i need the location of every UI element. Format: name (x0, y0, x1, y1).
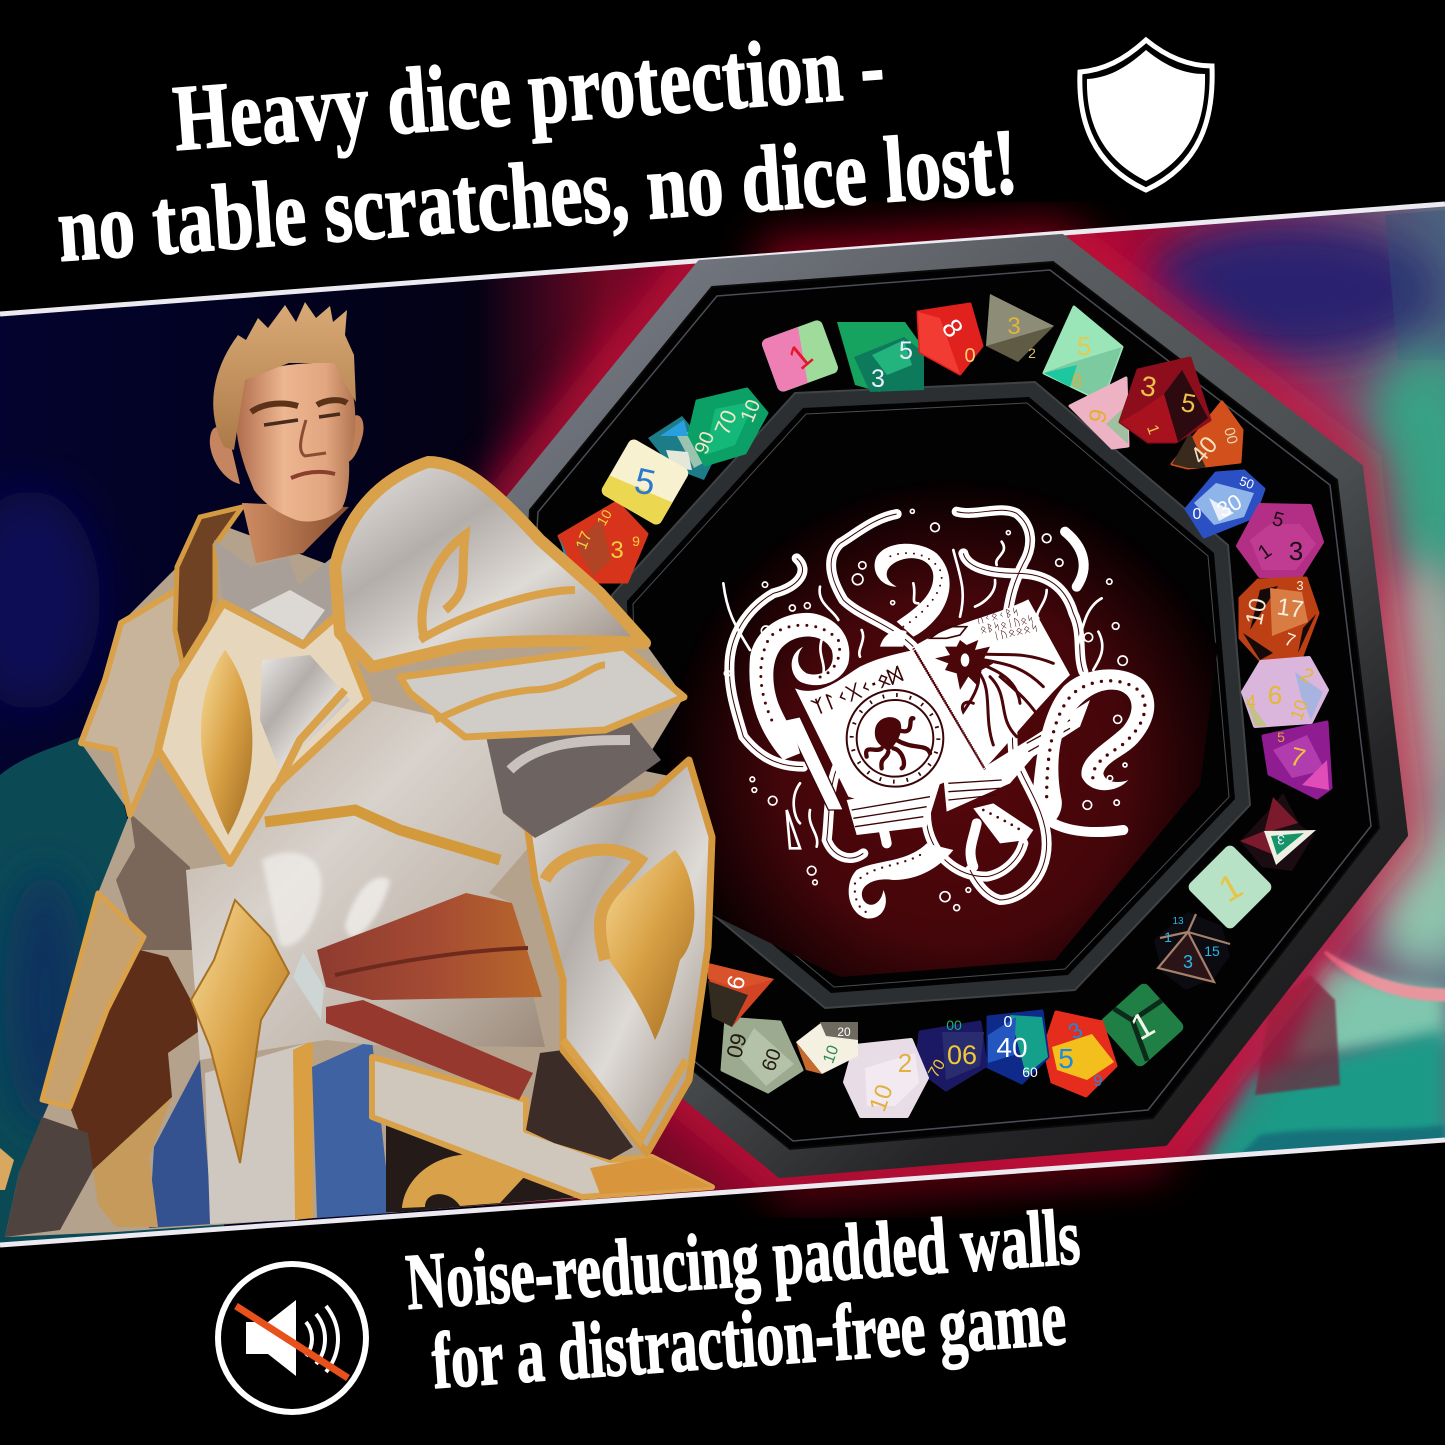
chest gold flame (201, 650, 252, 835)
right page script line 2: ᛟᛒᛋᛟᛁᚢᛟᛋ (979, 613, 1035, 636)
collar highlight (250, 590, 325, 640)
die 14 (1240, 793, 1316, 871)
waist gold band (265, 810, 500, 860)
inner octagon wall (612, 382, 1250, 1008)
die 28 (689, 389, 767, 465)
die 11: 17 (1275, 593, 1305, 624)
dark waist armor (116, 813, 192, 950)
die 8: 00 (1220, 426, 1241, 446)
seal creature tentacles (866, 718, 930, 768)
red glow behind tray (487, 237, 1405, 1175)
left blue tabard (149, 1060, 212, 1228)
white center strip (205, 1043, 307, 1224)
right ear (347, 415, 364, 462)
die 18: 5 (1058, 1043, 1074, 1074)
chest gold edge (275, 690, 345, 790)
die 16: 1 (1164, 929, 1172, 945)
leather arm interior (70, 950, 205, 1170)
lower pauldron plate (400, 647, 684, 737)
right teal mist (1365, 350, 1445, 590)
top tentacle (875, 544, 950, 637)
tray rolling channel (512, 262, 1379, 1149)
die 12: 4 (1246, 692, 1256, 712)
left arm gold strip (42, 893, 144, 1107)
seal rune marks (852, 695, 938, 782)
left sky glow (0, 490, 100, 710)
die 19: 60 (1022, 1064, 1038, 1080)
seal rings (847, 690, 943, 787)
die 26 (600, 437, 690, 527)
mouth (291, 472, 335, 478)
die 18: 3 (1064, 1017, 1087, 1045)
sword stub (0, 1148, 14, 1190)
left teal hills (0, 725, 230, 1250)
die 4: 3 (1007, 313, 1021, 340)
die 16 (1154, 912, 1230, 990)
neck (242, 503, 349, 563)
skirt orange corner (590, 1157, 712, 1194)
die 23: 09 (721, 1031, 752, 1061)
bubbles (724, 509, 1127, 911)
distant ship (1255, 975, 1340, 1095)
die 3: 8 (936, 314, 969, 343)
right page creature tentacles (962, 653, 1053, 745)
die 13 (1263, 722, 1331, 798)
die 13: 7 (1287, 741, 1309, 773)
right purple sky (1140, 220, 1440, 360)
die 12 (1243, 658, 1327, 726)
die 19 (988, 1011, 1048, 1083)
die 2 front (854, 337, 924, 393)
dice tray (487, 237, 1405, 1175)
red glow above band (732, 202, 1117, 256)
die 15 (1186, 843, 1274, 931)
die 11: 7 (1282, 629, 1298, 651)
die 24 (708, 963, 774, 1027)
torso highlight 2 (345, 877, 390, 937)
forearm gold flame (600, 850, 694, 1040)
dice ring (559, 294, 1331, 1116)
chest silver inset (260, 655, 350, 770)
die 9: 30 (1212, 489, 1246, 523)
right pauldron (335, 462, 645, 667)
upper arm dark (484, 713, 661, 838)
die 20: 06 (947, 1040, 977, 1070)
nose (301, 420, 326, 456)
tentacle suckers (761, 553, 1145, 913)
die 17: 1 (1123, 1003, 1161, 1048)
die 11 (1240, 578, 1318, 660)
die 2 front: 5 (899, 337, 913, 365)
body silhouette (5, 462, 712, 1237)
die 11: 3 (1296, 578, 1304, 593)
right pale mist (1377, 538, 1445, 810)
die 2 front: 3 (871, 365, 885, 393)
die 24: 6 (722, 973, 751, 993)
die 25: 10 (593, 507, 615, 528)
knight figure (0, 302, 712, 1237)
lower tentacle (849, 843, 953, 918)
die 16: 3 (1183, 952, 1193, 972)
right page script line 3: ᛁᚢᛟᛟᛟᛋ (991, 621, 1040, 643)
die 4: 2 (1028, 345, 1036, 361)
tray outer wall (487, 237, 1405, 1175)
die 22: 20 (837, 1025, 851, 1039)
die 7: 5 (1179, 387, 1198, 419)
red glow below band (760, 1140, 1170, 1200)
chest plate (158, 603, 368, 863)
die 20: 70 (925, 1057, 949, 1081)
die 26: 5 (631, 459, 659, 504)
eyes (264, 414, 340, 425)
die 28: 90 (691, 429, 719, 457)
pauldron plate line (420, 590, 575, 640)
die 5: 5 (1077, 331, 1091, 361)
die 22 (796, 1022, 858, 1074)
die 16: 15 (1204, 943, 1220, 959)
ribbon hatch lines (729, 510, 1083, 900)
eyebrows (251, 400, 347, 412)
book page block left (847, 783, 940, 835)
die 8 (1172, 402, 1242, 469)
die 5 (1044, 307, 1122, 401)
right page (913, 599, 1070, 768)
die 1 (760, 319, 840, 393)
die 9 (1186, 471, 1264, 537)
lower plate filigree (435, 665, 605, 720)
cape collar (175, 507, 242, 700)
die 28: 70 (709, 406, 742, 438)
background scene band (0, 200, 1445, 1250)
forearm gold band (545, 850, 640, 960)
die 3: 0 (964, 345, 976, 367)
die 1: 1 (781, 336, 820, 377)
left tentacle (749, 613, 849, 760)
blue tabard centre (312, 1040, 391, 1218)
hair (213, 302, 356, 450)
belt silver clasp (293, 952, 324, 1020)
book cover left (785, 717, 843, 810)
die 6: 9 (1084, 406, 1113, 426)
left ear (210, 427, 240, 484)
upper arm highlight (510, 740, 630, 770)
gauntlet right (526, 1050, 633, 1160)
gold center strip (293, 1040, 313, 1220)
die 16: 13 (1172, 916, 1184, 927)
right pale sky (1290, 960, 1445, 1060)
page block hatch left (852, 797, 930, 827)
die 9: 0 (1193, 506, 1202, 523)
left blue hill shade (5, 870, 85, 1130)
open book (785, 599, 1090, 835)
die 25: 9 (632, 533, 640, 549)
die 19: 0 (1004, 1014, 1013, 1031)
die 25: 17 (573, 529, 596, 552)
page corner sigil (930, 627, 967, 638)
knee gold (402, 1154, 526, 1208)
die 28: 10 (737, 397, 765, 425)
die 10: 3 (1289, 536, 1303, 566)
book page block right (943, 700, 1090, 812)
white band edge top (0, 204, 1445, 314)
die 23: 60 (758, 1046, 786, 1074)
right teal panel (1385, 210, 1445, 360)
belt strap (326, 1000, 533, 1100)
pink arc (1325, 952, 1445, 1000)
die 27 (648, 416, 716, 480)
top tentacle stub (880, 630, 907, 647)
sea dark wave (1241, 1123, 1445, 1152)
die 18 (1044, 1012, 1116, 1096)
die 4 (986, 294, 1054, 362)
heading top (54, 14, 1021, 282)
die 15: 1 (1211, 865, 1249, 910)
creature eye (961, 653, 969, 667)
die 25 (559, 502, 647, 582)
die 7: 3 (1138, 370, 1159, 403)
face (236, 363, 355, 522)
neck collar (214, 540, 340, 645)
die 11: 10 (1241, 596, 1273, 628)
die 17 (1098, 981, 1186, 1069)
heading line 1: Heavy dice protection - (170, 14, 888, 171)
die 13: 5 (1277, 729, 1285, 745)
left page script: ᛉᛚᚲᚷᚲ·ᛟᛞ (809, 663, 905, 718)
book spine line (913, 648, 985, 769)
icon: shield (1080, 40, 1212, 190)
right lower pale green (1365, 790, 1445, 970)
inner thin line (633, 403, 1229, 987)
heading line 2: no table scratches, no dice lost! (54, 109, 1021, 282)
die 21: 2 (898, 1048, 912, 1078)
die 21 (845, 1040, 927, 1116)
seal creature head (875, 717, 901, 752)
lower right tentacle (973, 803, 1033, 843)
die 5: 8 (1072, 371, 1082, 391)
forearm lower gold edge (563, 1040, 686, 1140)
die 10 (1238, 505, 1322, 577)
caption line 1: Noise-reducing padded walls (403, 1193, 1083, 1327)
dark under skirt (386, 1123, 582, 1212)
die 9: 50 (1237, 473, 1256, 492)
die 3 (918, 304, 982, 374)
belt fold (335, 948, 528, 975)
seal inner ring (857, 700, 933, 777)
right sea (1195, 1030, 1445, 1170)
die 7: 1 (1143, 423, 1162, 437)
die 2 back (837, 322, 925, 392)
ribbon tentacles (729, 510, 1123, 900)
white band edge bottom (0, 1140, 1445, 1245)
die 20: 00 (946, 1017, 962, 1033)
die 23 (721, 1018, 802, 1092)
die 14: 3 (1277, 832, 1285, 848)
caption line 2: for a distraction-free game (429, 1274, 1069, 1406)
right tentacle (1033, 669, 1154, 824)
inner black floor (627, 397, 1235, 993)
torso highlight (262, 853, 322, 946)
icon: muted speaker (218, 1264, 366, 1412)
channel thin line (518, 270, 1371, 1141)
right page script line 1: ᚢᚲᛟᚲᛒᛋ (975, 606, 1020, 626)
die 19: 40 (996, 1032, 1028, 1063)
die 6 (1070, 378, 1128, 448)
die 12: 10 (1286, 697, 1312, 723)
left shoulder pad (81, 590, 190, 815)
pauldron filigree (422, 535, 465, 640)
die 10: 1 (1254, 540, 1276, 564)
thin wiggles (723, 542, 1102, 848)
left page (795, 650, 983, 801)
die 22: 10 (820, 1043, 842, 1066)
lower left skirt (93, 1097, 172, 1227)
torso plate (186, 700, 545, 1060)
belt gold crest (191, 900, 289, 1163)
bottom caption (403, 1193, 1083, 1406)
die 18: 9 (1094, 1073, 1103, 1090)
skirt right plate (372, 1057, 712, 1197)
die 21: 10 (864, 1081, 899, 1115)
forearm guard (526, 760, 712, 1153)
die 20 (916, 1017, 986, 1090)
red felt mat (678, 493, 1217, 977)
die 12: 6 (1268, 680, 1282, 710)
die 12: 2 (1297, 664, 1317, 688)
die 10: 5 (1270, 508, 1286, 532)
right page creature body (935, 640, 993, 690)
kraken and book artwork (723, 509, 1154, 918)
die 25: 3 (610, 537, 624, 564)
left glove (5, 1117, 93, 1237)
die 7 (1120, 358, 1210, 442)
belt sash (317, 893, 542, 1000)
page block hatch right (948, 720, 1070, 800)
die 8: 40 (1185, 431, 1223, 469)
